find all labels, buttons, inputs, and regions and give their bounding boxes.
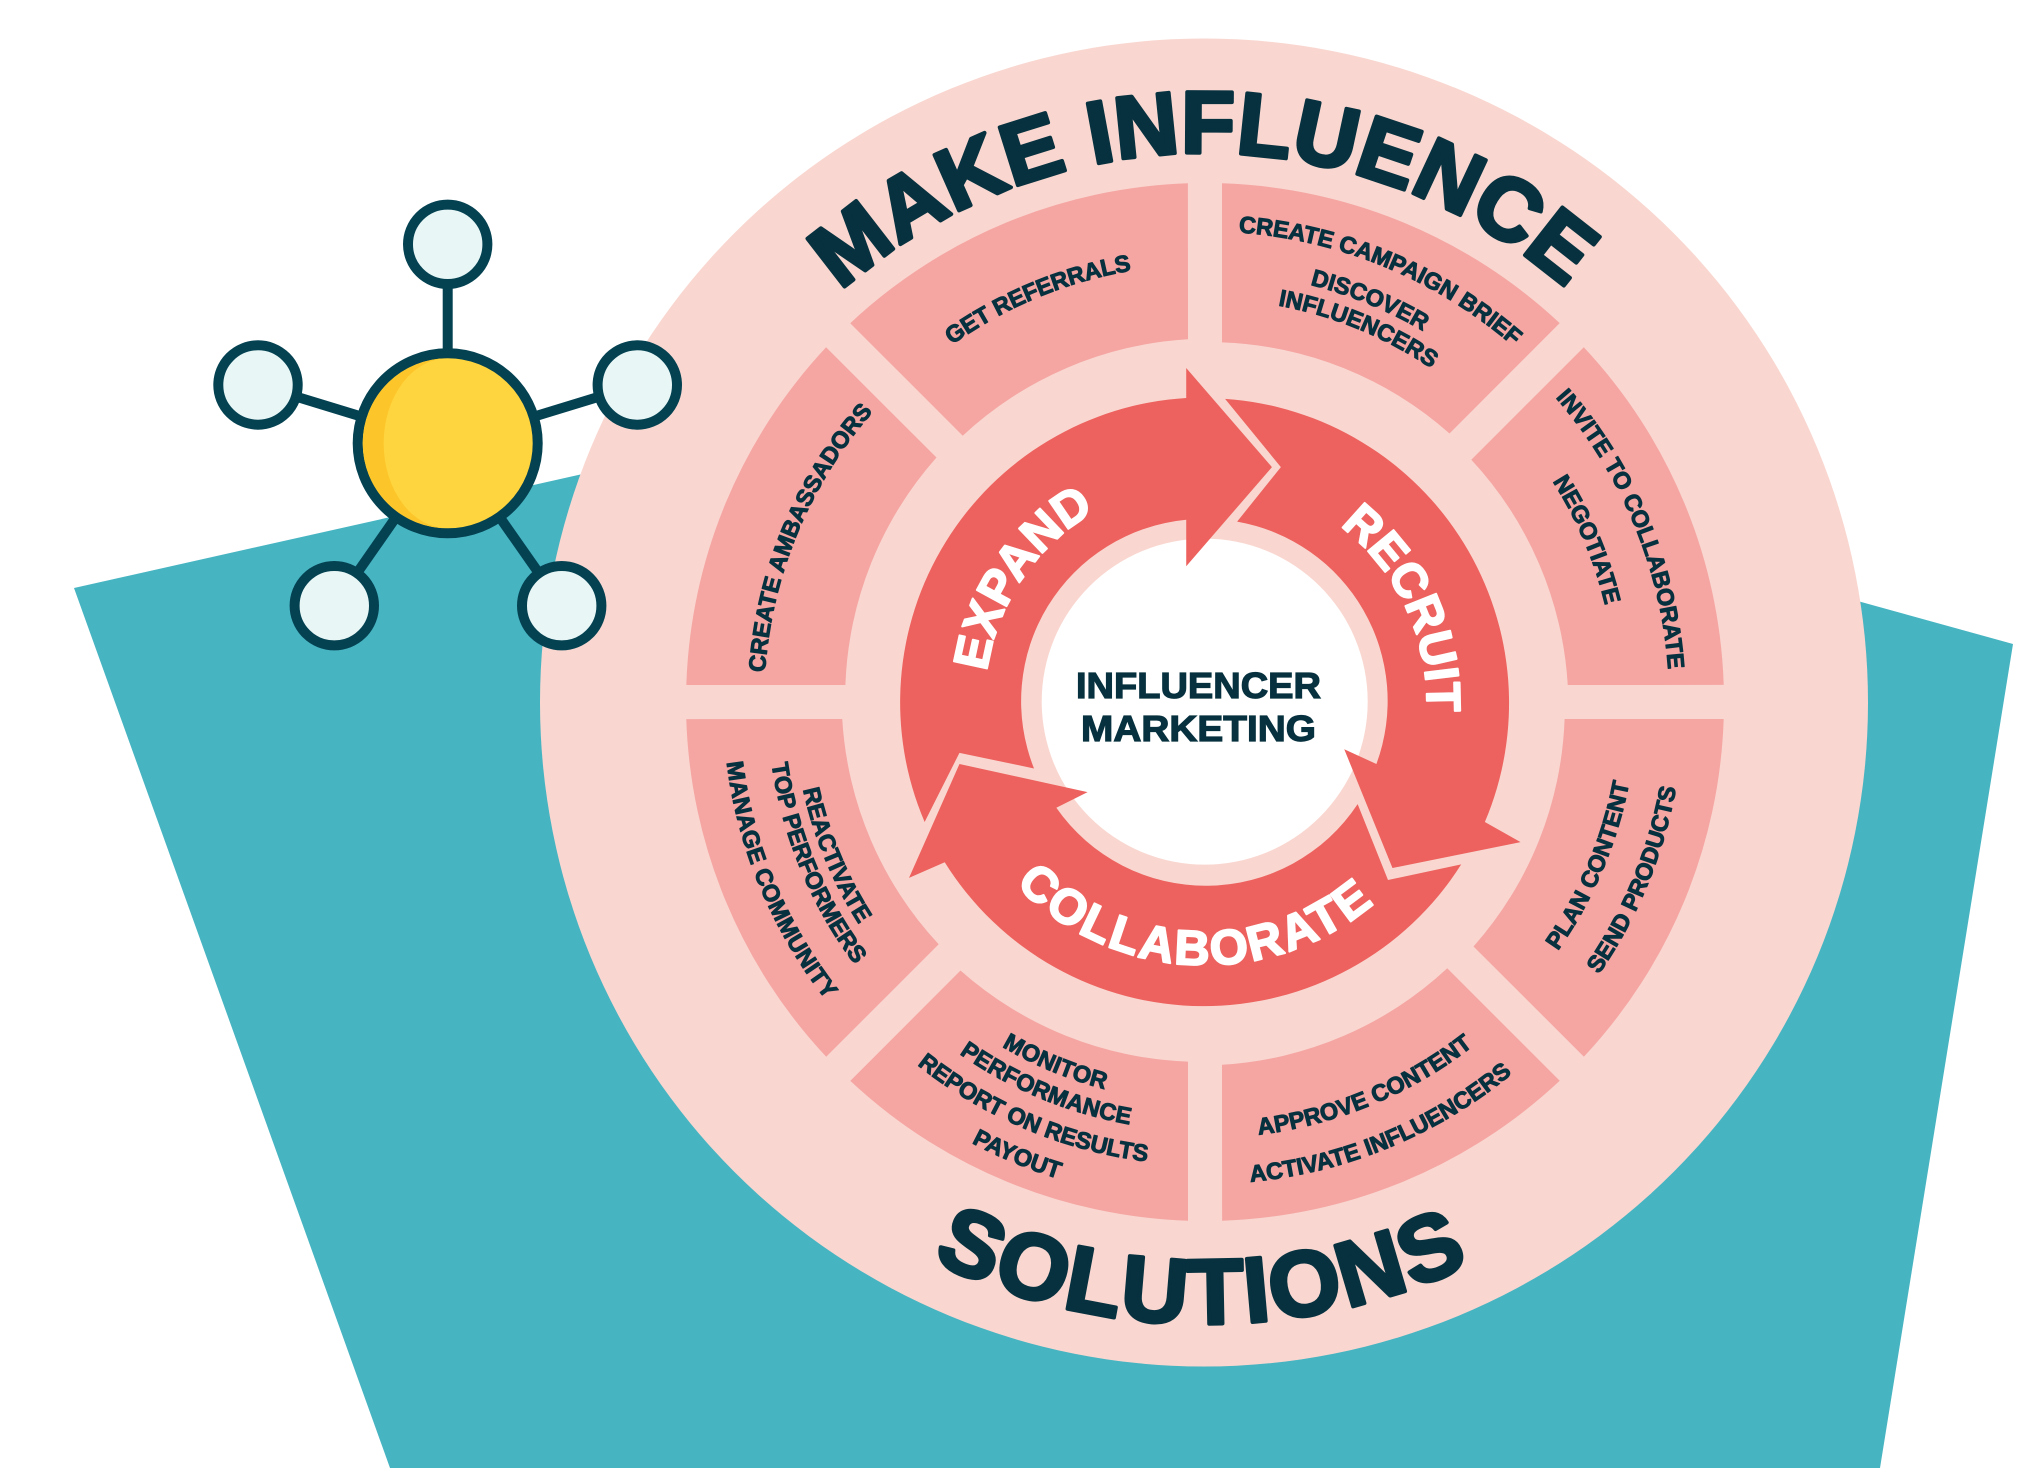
teal background shape (74, 373, 2013, 1468)
centre title: INFLUENCER (1076, 665, 1321, 706)
white centre circle (1042, 539, 1368, 865)
text: top performers: TOP PERFORMERS (772, 761, 866, 963)
segment: approve content, activate influencers (1144, 904, 1560, 1320)
hub circle (358, 353, 538, 533)
text: discover: DISCOVER (1311, 269, 1429, 332)
node: right (598, 345, 677, 425)
node: bottom left (295, 566, 374, 645)
node: bottom right (522, 566, 601, 645)
text: activate influencers: ACTIVATE INFLUENCERS (1250, 1063, 1510, 1182)
arrow label: expand: EXPAND (953, 489, 1088, 670)
segment: get referrals (850, 84, 1266, 500)
segment: invite to collaborate, negotiate (1407, 347, 1823, 763)
segment: create ambassadors (686, 347, 936, 685)
text: report on results: REPORT ON RESULTS (918, 1052, 1148, 1162)
cycle arrows (900, 368, 1521, 1006)
arrow: expand (900, 368, 1272, 822)
segment: plan content, send products (1474, 719, 1724, 1057)
segment: monitor performance, report, payout (850, 970, 1188, 1221)
text: get referrals: GET REFERRALS (946, 255, 1130, 342)
text: negotiate: NEGOTIATE (1552, 474, 1621, 605)
arrow: recruit (1225, 399, 1521, 868)
hub shading (363, 358, 448, 528)
ring of eight segments (587, 84, 1823, 1320)
arrow label: recruit: RECRUIT (1342, 502, 1462, 712)
text: manage community: MANAGE COMMUNITY (726, 761, 839, 996)
text: invite to collaborate: INVITE TO COLLABORATE (1556, 388, 1685, 669)
icon: network hub (218, 205, 677, 645)
node: top (408, 205, 487, 284)
arrow label: collaborate: COLLABORATE (1022, 866, 1374, 966)
text: plan content: PLAN CONTENT (1544, 779, 1628, 950)
text: monitor: MONITOR (1002, 1032, 1108, 1090)
arrow: collaborate (909, 764, 1461, 1006)
text: send products: SEND PRODUCTS (1587, 786, 1676, 972)
centre title: MARKETING (1081, 708, 1316, 749)
segment: create campaign brief, discover influencers (1222, 183, 1560, 434)
segment: reactivate, manage community (587, 641, 1003, 1057)
title: make influence: MAKE INFLUENCE (805, 90, 1602, 289)
network connectors (258, 244, 637, 606)
text: influencers: INFLUENCERS (1279, 289, 1438, 367)
title: solutions: SOLUTIONS (938, 1208, 1464, 1326)
text: performance: PERFORMANCE (960, 1040, 1132, 1125)
node: left (218, 345, 298, 425)
text: payout: PAYOUT (972, 1128, 1064, 1178)
text: create campaign brief: CREATE CAMPAIGN BRIEF (1240, 216, 1524, 342)
text: create ambassadors: CREATE AMBASSADORS (748, 404, 871, 672)
centre title (1076, 665, 1321, 749)
outer pale circle (540, 38, 1868, 1366)
text: reactivate: REACTIVATE (802, 786, 872, 924)
text: approve content: APPROVE CONTENT (1258, 1032, 1470, 1136)
